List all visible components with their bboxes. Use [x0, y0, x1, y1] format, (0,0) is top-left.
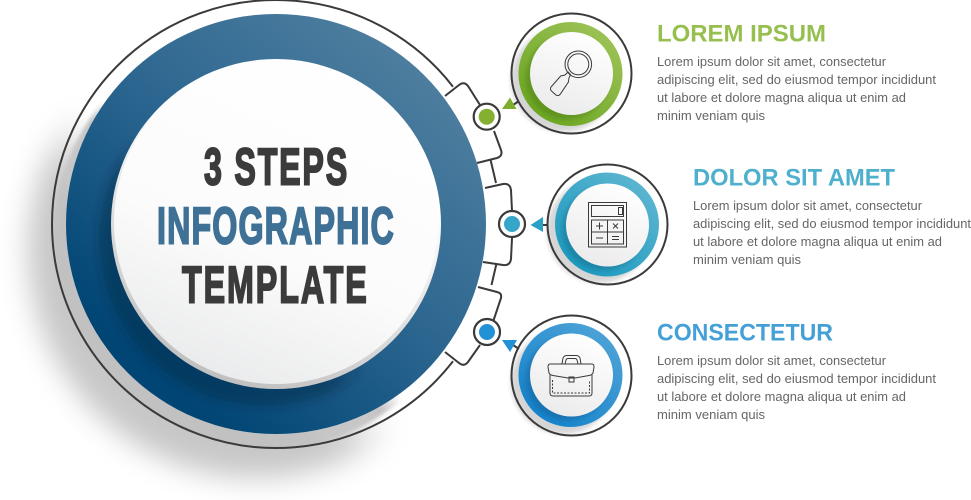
step 3 text: adipiscing elit, sed do eiusmod tempor incididunt	[657, 372, 937, 386]
main blue disc	[66, 14, 486, 434]
step 1 text: ut labore et dolore magna aliqua ut enim ad	[657, 91, 906, 105]
step 2 connector node	[499, 211, 525, 237]
icon: calculator	[588, 202, 626, 247]
step 3 text	[657, 320, 937, 422]
main outer ring with three tabs	[52, 0, 512, 448]
step 2 badge	[547, 164, 668, 284]
step 1 badge	[511, 14, 632, 134]
icon: magnifying glass	[550, 51, 592, 96]
step 1 text: Lorem ipsum dolor sit amet, consectetur	[657, 55, 886, 69]
icon: briefcase	[548, 356, 594, 396]
shadow of white disc on blue	[96, 150, 356, 408]
step 3 text: CONSECTETUR	[657, 320, 833, 346]
step 3 connector node	[474, 319, 500, 345]
step 1 text: adipiscing elit, sed do eiusmod tempor incididunt	[657, 73, 937, 87]
title: INFOGRAPHIC	[157, 198, 394, 256]
arrow: step 3	[502, 340, 519, 352]
step 3 badge	[511, 316, 632, 436]
step 2 text: adipiscing elit, sed do eiusmod tempor incididunt	[693, 217, 971, 231]
step 3 text: minim veniam quis	[657, 408, 765, 422]
step 2 text	[693, 164, 971, 267]
step 1 text: minim veniam quis	[657, 109, 765, 123]
step 3 text: ut labore et dolore magna aliqua ut enim ad	[657, 390, 906, 404]
step 2 text: Lorem ipsum dolor sit amet, consectetur	[693, 199, 922, 213]
step 1 text: LOREM IPSUM	[657, 20, 826, 48]
step 2 text: minim veniam quis	[693, 253, 801, 267]
step 3 text: Lorem ipsum dolor sit amet, consectetur	[657, 354, 886, 368]
step 2 text: DOLOR SIT AMET	[693, 164, 895, 192]
title: TEMPLATE	[182, 257, 367, 315]
arrow: step 2	[530, 217, 548, 232]
main circle drop shadow	[14, 104, 399, 492]
step 1 connector node	[474, 104, 500, 130]
step 2 text: ut labore et dolore magna aliqua ut enim ad	[693, 235, 942, 249]
central white disc	[111, 59, 441, 389]
title	[157, 139, 394, 315]
arrow: step 1	[502, 98, 519, 109]
step 1 text	[657, 20, 937, 123]
title: 3 STEPS	[204, 139, 347, 197]
